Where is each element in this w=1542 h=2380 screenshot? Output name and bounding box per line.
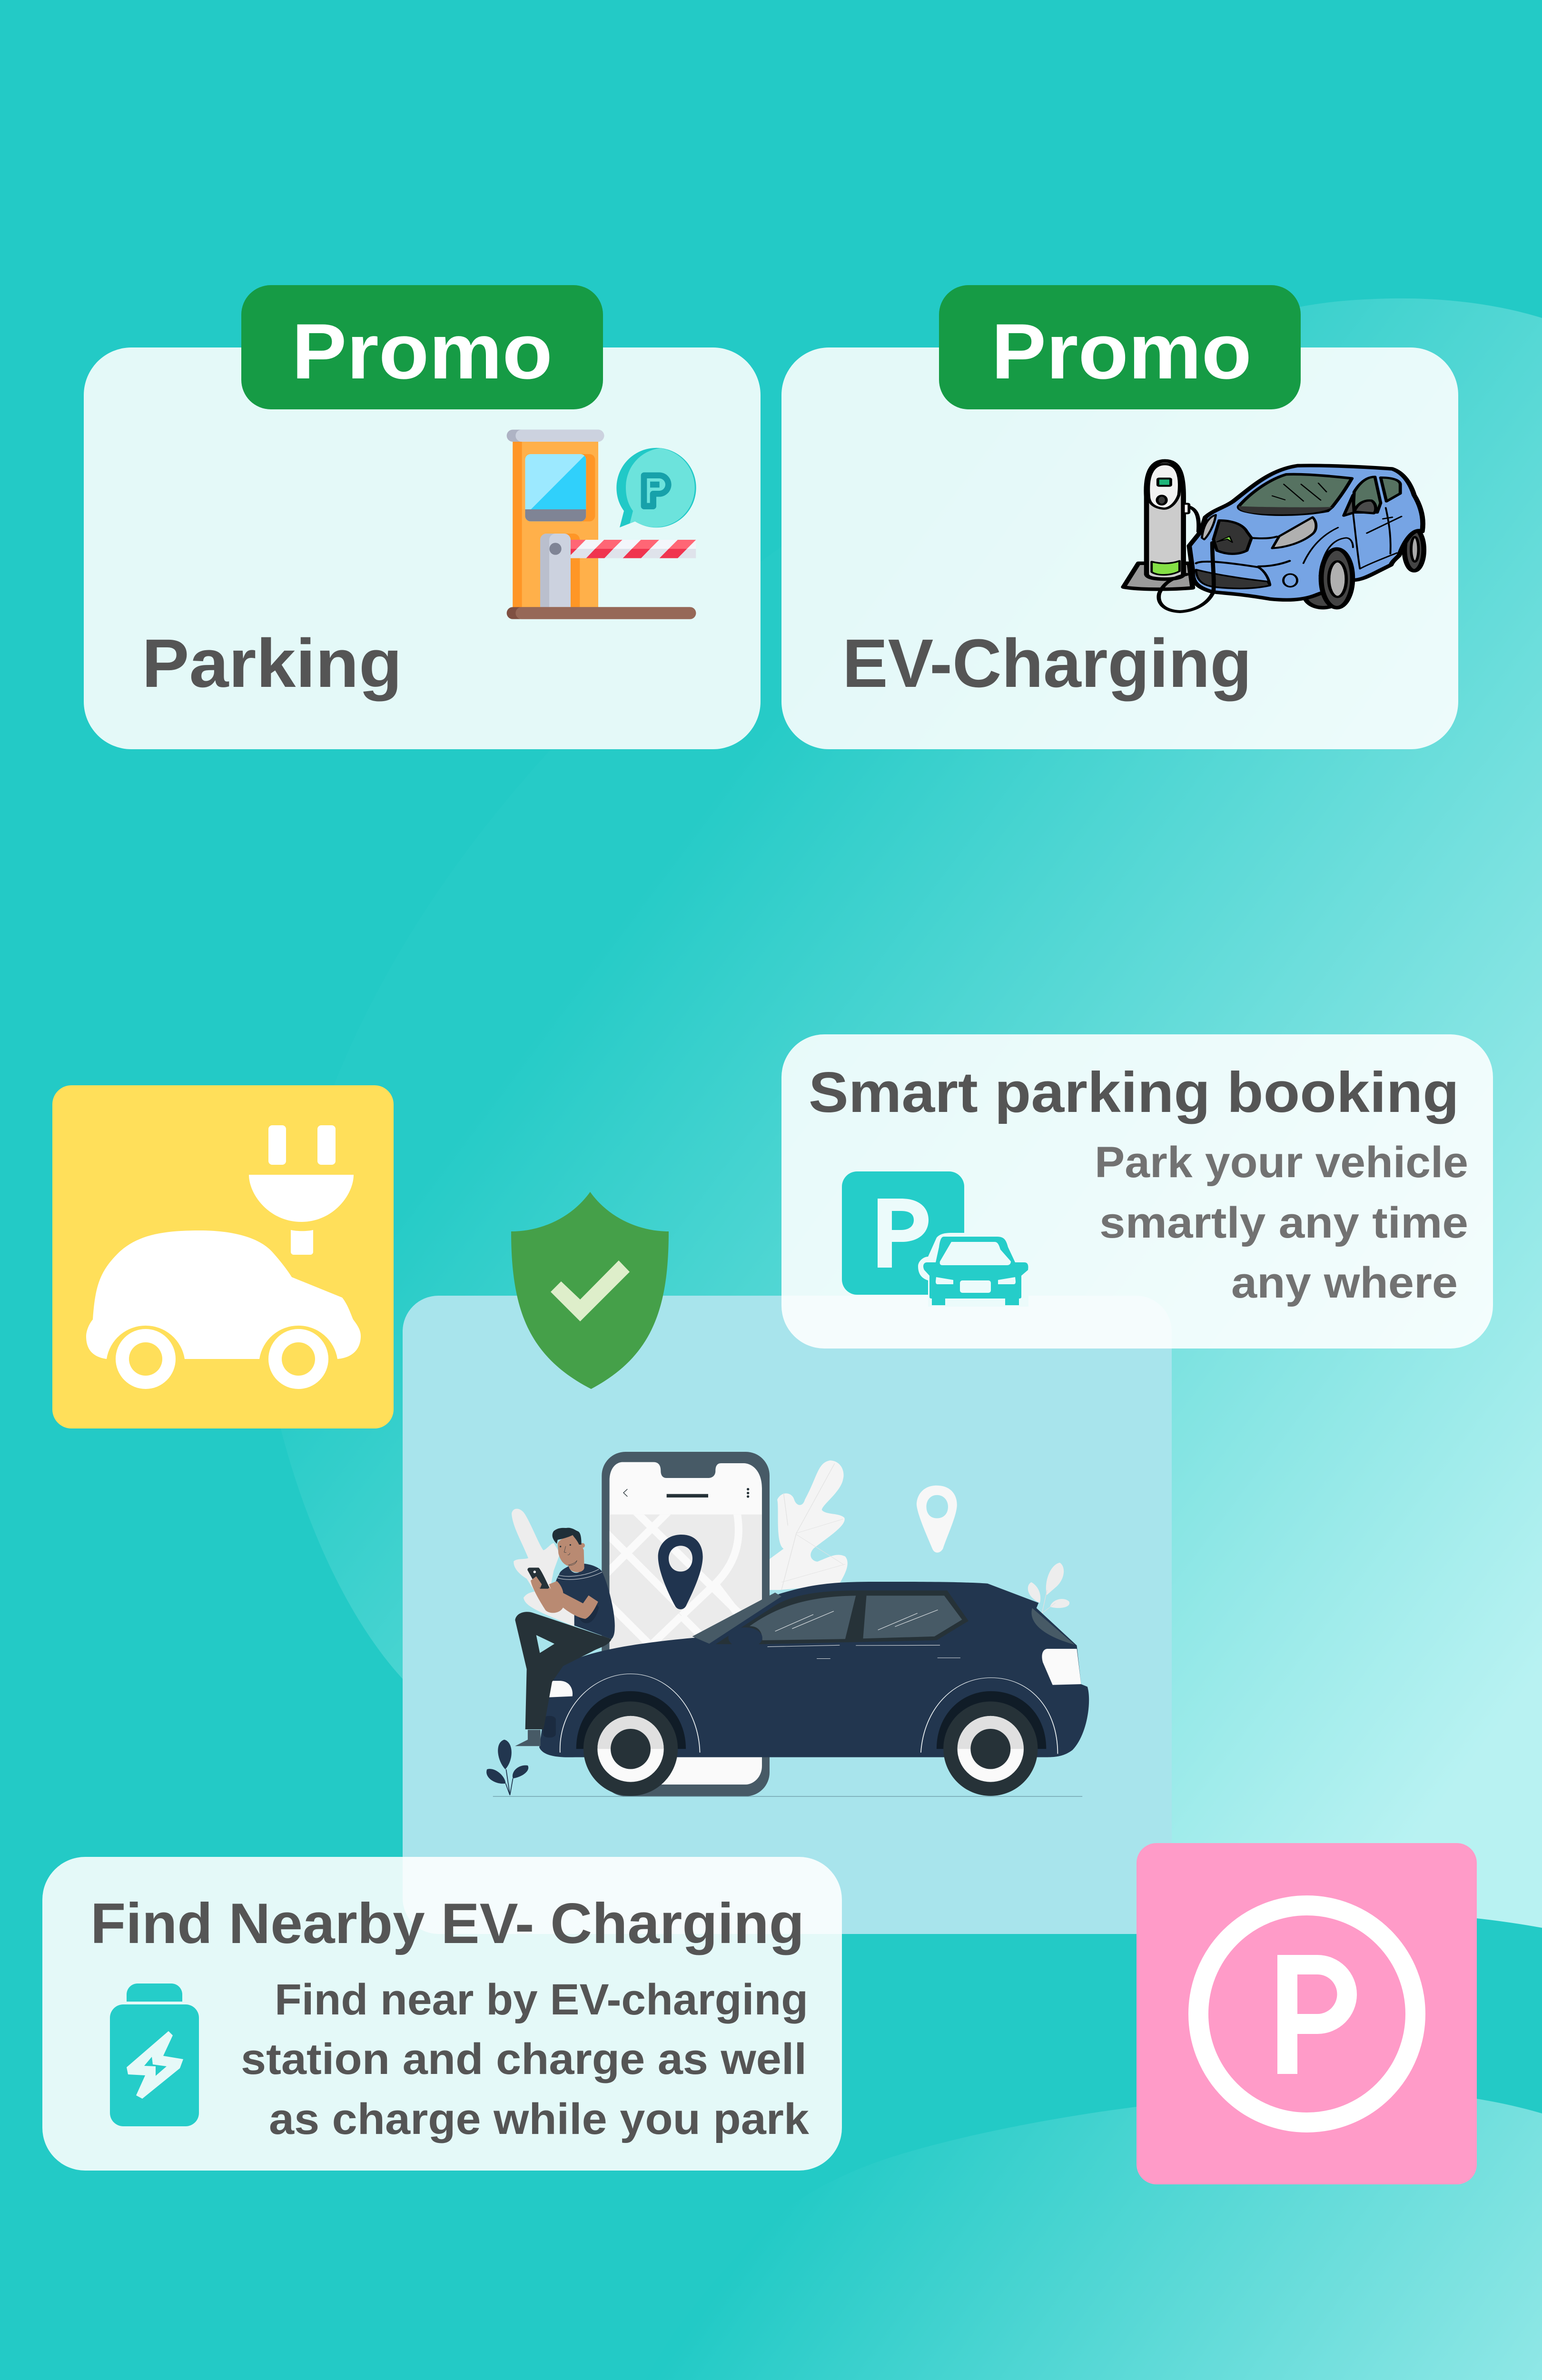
badge: promo left: Promo — [292, 307, 553, 395]
plant — [486, 1740, 528, 1795]
icon: battery with bolt — [110, 1983, 199, 2126]
heading: find nearby EV charging: Find Nearby EV- Charging — [90, 1892, 804, 1955]
description — [1095, 1138, 1468, 1307]
badge: promo right — [939, 285, 1301, 409]
icon: shield with check — [511, 1192, 669, 1389]
panel: central illustration backdrop — [403, 1296, 1172, 1934]
heading: EV-Charging: EV-Charging — [842, 625, 1252, 702]
icon: electric car at charger — [1124, 461, 1424, 612]
icon tile: parking symbol — [1137, 1843, 1477, 2184]
phone and map — [512, 1452, 770, 1796]
heading: Parking: Parking — [142, 625, 402, 702]
badge: promo left — [241, 285, 603, 409]
heading: smart parking booking: Smart parking booking — [809, 1061, 1459, 1124]
panel: find nearby EV charging — [42, 1857, 842, 2171]
icon: parking sign and car — [842, 1171, 1028, 1307]
man with phone — [515, 1528, 615, 1729]
car — [486, 1582, 1089, 1796]
icon: parking barrier booth — [507, 430, 696, 619]
badge: promo right: Promo — [991, 307, 1252, 395]
description: as charge while you park — [269, 2095, 810, 2143]
background leaves and location pin — [770, 1460, 1069, 1613]
description: smartly any time — [1099, 1199, 1468, 1247]
panel: smart parking booking — [781, 1034, 1493, 1349]
description: station and charge as well — [241, 2035, 807, 2083]
panel: parking promo card — [84, 347, 761, 749]
description — [241, 1975, 810, 2143]
illustration: man on car with phone map — [486, 1452, 1089, 1796]
icon tile: electric car and plug — [52, 1085, 394, 1428]
panel: EV charging promo card — [781, 347, 1458, 749]
description: any where — [1231, 1259, 1458, 1307]
description: Park your vehicle — [1095, 1138, 1468, 1187]
description: Find near by EV-charging — [275, 1975, 808, 2024]
